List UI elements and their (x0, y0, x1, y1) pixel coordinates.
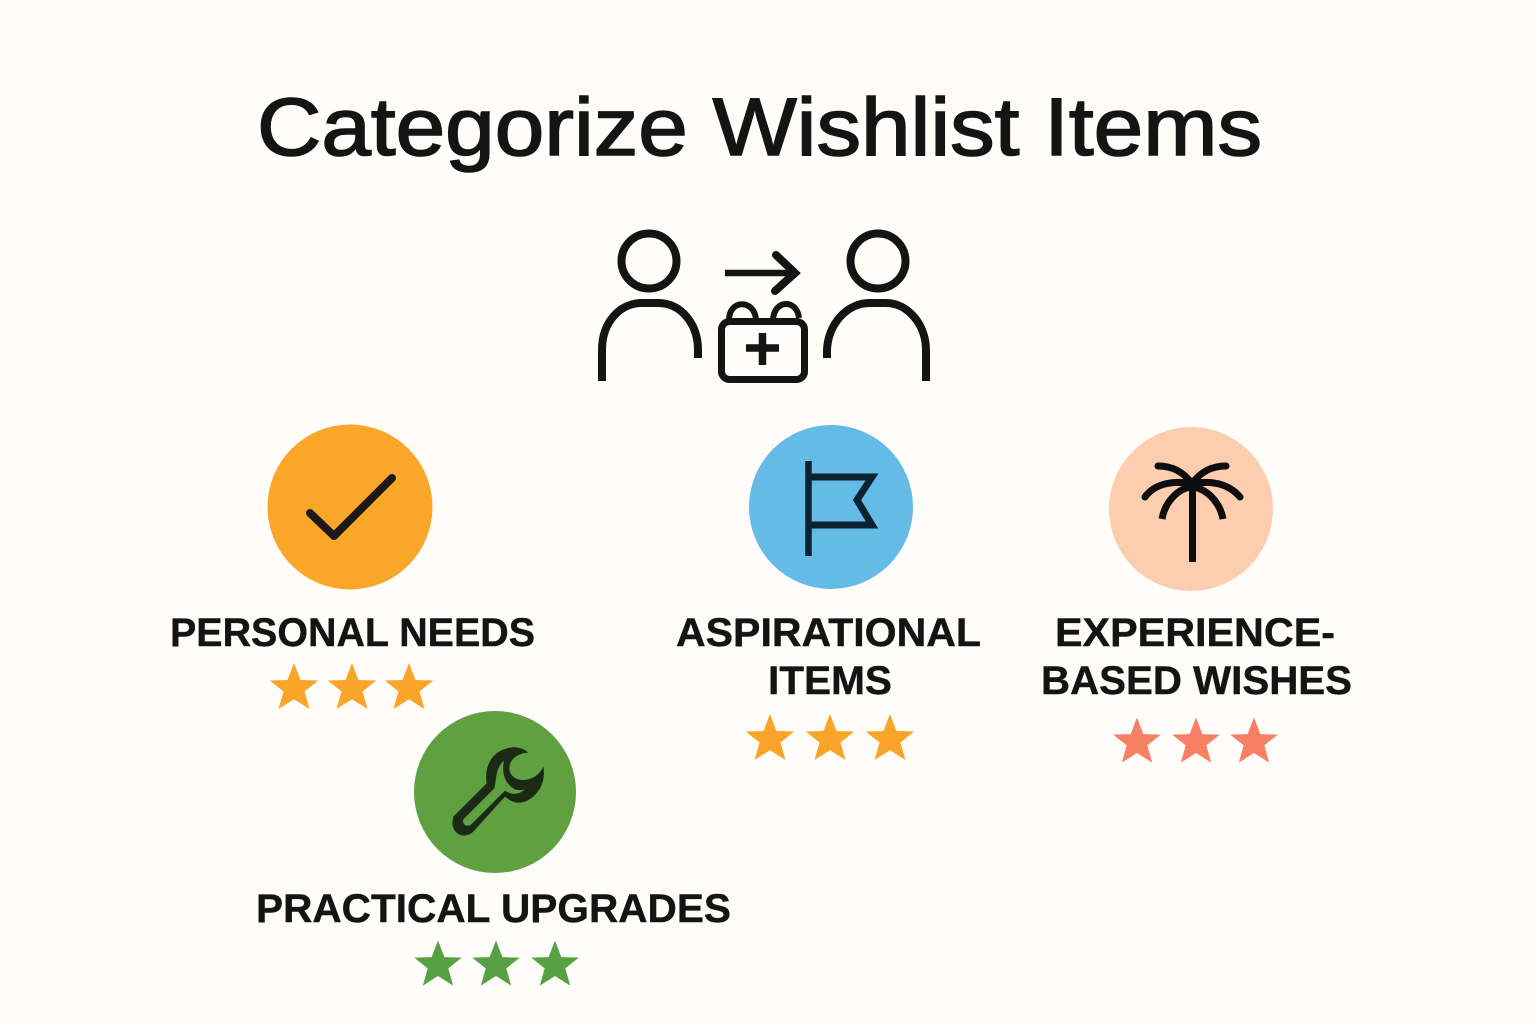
category: experience-based wishes (1041, 427, 1352, 763)
label: aspirational items: ASPIRATIONAL (676, 611, 981, 655)
category: aspirational items (676, 425, 981, 760)
icon: peach palm tree circle (1109, 427, 1273, 591)
label: experience-based wishes (1041, 611, 1352, 703)
rating stars: personal needs (270, 663, 433, 709)
icon: orange check circle (268, 424, 432, 590)
label: personal needs: PERSONAL NEEDS (170, 611, 535, 655)
category: personal needs (170, 424, 535, 709)
label: experience-based wishes: BASED WISHES (1041, 659, 1352, 703)
label: aspirational items (676, 611, 981, 703)
rating stars: aspirational items (746, 714, 914, 760)
rating stars: experience-based wishes (1113, 718, 1278, 763)
label: practical upgrades: PRACTICAL UPGRADES (256, 887, 731, 931)
icon: blue flag circle (749, 425, 913, 589)
rating stars: practical upgrades (414, 940, 579, 986)
icon: green wrench circle (414, 711, 576, 873)
label: aspirational items: ITEMS (768, 659, 892, 703)
label: experience-based wishes: EXPERIENCE- (1055, 611, 1335, 655)
title: Categorize Wishlist Items (257, 82, 1262, 173)
category: practical upgrades (256, 711, 731, 986)
icon: two people exchanging a gift (602, 234, 926, 381)
